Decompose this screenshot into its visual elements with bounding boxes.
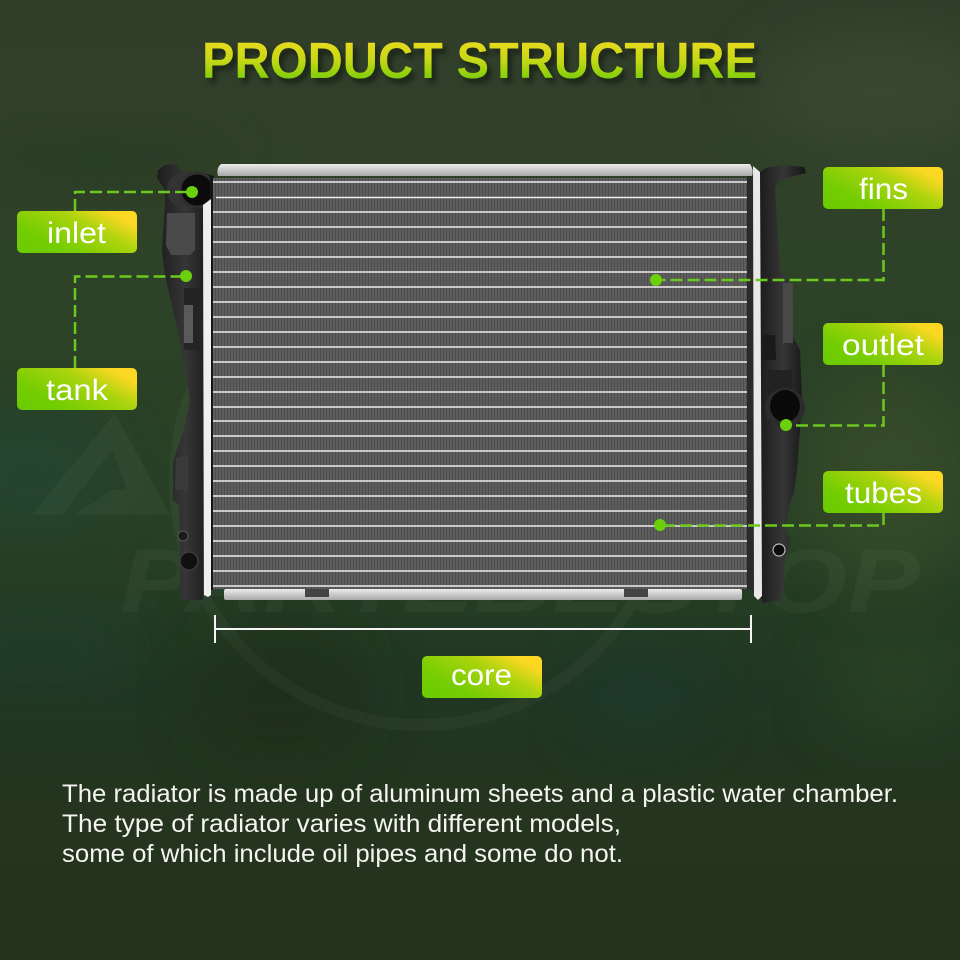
callout: core: core <box>451 659 512 692</box>
title: PRODUCT STRUCTURE <box>202 32 757 89</box>
radiator tubes <box>213 182 750 586</box>
callout: tank: tank <box>46 374 109 407</box>
right plastic tank <box>760 165 806 603</box>
callout: outlet <box>780 323 943 431</box>
description text: The radiator is made up of aluminum sheets and a plastic water chamber. <box>62 780 898 808</box>
left side strip <box>203 199 211 597</box>
description text <box>62 780 898 868</box>
left plastic tank <box>157 164 214 600</box>
watermark logo: PARTZBESTOP <box>120 532 921 632</box>
radiator core fins <box>212 178 753 589</box>
bottom frame bar <box>224 589 742 600</box>
callout: outlet: outlet <box>842 329 925 362</box>
callout: fins <box>650 167 943 286</box>
callout: tank <box>17 270 192 410</box>
top frame bar <box>217 164 753 176</box>
callout: core <box>422 656 542 698</box>
core width bracket <box>215 615 751 643</box>
callout: fins: fins <box>859 173 908 206</box>
right side strip <box>753 166 762 600</box>
callout: inlet <box>17 186 198 253</box>
outlet pipe <box>765 388 805 428</box>
radiator <box>157 164 806 603</box>
core side shadow <box>210 176 754 590</box>
inlet pipe <box>167 173 214 207</box>
callout: inlet: inlet <box>47 217 107 250</box>
description text: The type of radiator varies with different models, <box>62 810 621 838</box>
callout: tubes: tubes <box>845 477 922 510</box>
callout: tubes <box>654 471 943 531</box>
watermark logo <box>32 235 921 725</box>
description text: some of which include oil pipes and some do not. <box>62 840 623 868</box>
